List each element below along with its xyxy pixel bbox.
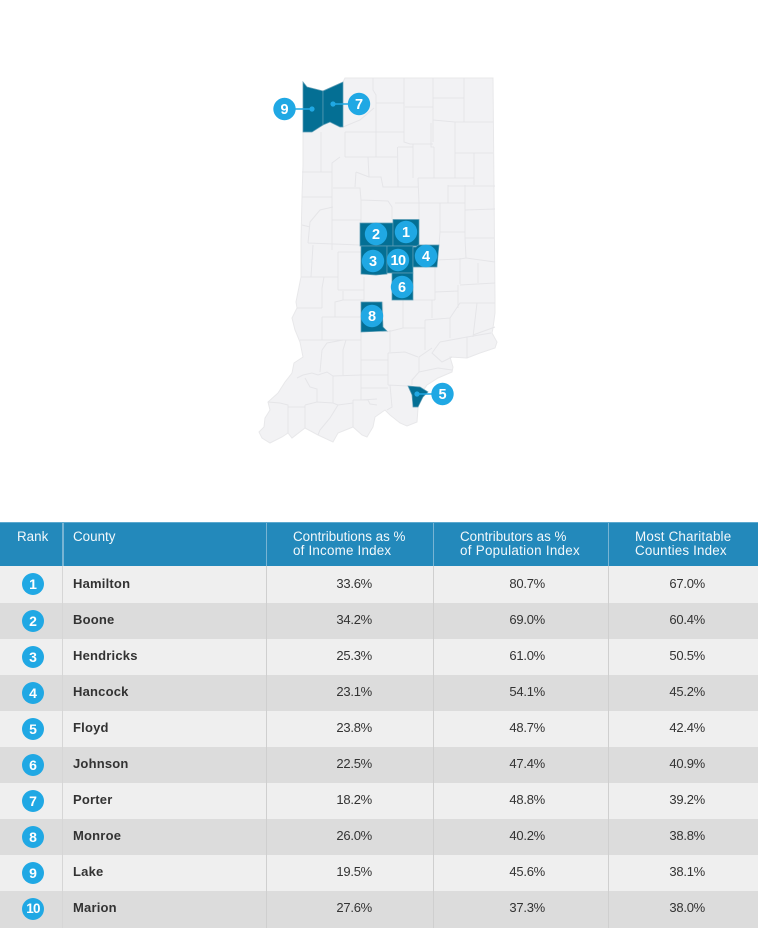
- connector: Floyd: [414, 391, 442, 397]
- row 1: 33.6%: [336, 576, 372, 591]
- row 1: Hamilton: [73, 576, 130, 591]
- county: Hendricks: [361, 246, 387, 275]
- row 6: 22.5%: [336, 756, 372, 771]
- row 4: 54.1%: [509, 684, 545, 699]
- marker 9: 9: [280, 102, 289, 118]
- row 4: [0, 675, 758, 711]
- row 7: 39.2%: [669, 792, 705, 807]
- row 5: Floyd: [73, 720, 109, 735]
- heading: contributions: Contributions as %: [293, 529, 405, 544]
- marker 8: 8: [368, 309, 376, 325]
- row 8: [0, 819, 758, 855]
- heading: contributors: Contributors as %: [460, 529, 566, 544]
- county: Johnson: [392, 273, 413, 300]
- row 7: Porter: [73, 792, 112, 807]
- marker 7: [348, 93, 370, 115]
- row 1: [0, 566, 758, 603]
- row 9: 9: [29, 864, 37, 880]
- row 9: 45.6%: [509, 864, 545, 879]
- heading: contributors: [460, 529, 580, 558]
- row 5: 42.4%: [669, 720, 705, 735]
- marker 10: [387, 249, 409, 271]
- county: Monroe: [361, 302, 387, 332]
- heading: charitable index: Most Charitable: [635, 529, 731, 544]
- row 2: 34.2%: [336, 612, 372, 627]
- row 8: Monroe: [73, 828, 121, 843]
- row 3: [0, 639, 758, 675]
- row 10: [0, 891, 758, 928]
- rank markers: [273, 93, 454, 405]
- row 4: 4: [29, 684, 37, 700]
- row 7: 48.8%: [509, 792, 545, 807]
- row 2: 69.0%: [509, 612, 545, 627]
- map of Indiana: [258, 78, 498, 444]
- connector: Lake: [285, 106, 315, 112]
- row 9: 19.5%: [336, 864, 372, 879]
- row 1: 1: [29, 576, 37, 592]
- marker 6: [391, 276, 413, 298]
- row 10: Marion: [73, 900, 117, 915]
- row 3: 61.0%: [509, 648, 545, 663]
- heading: county: County: [73, 529, 115, 544]
- row 9: Lake: [73, 864, 103, 879]
- row 1: 80.7%: [509, 576, 545, 591]
- state outline: [259, 78, 497, 443]
- heading: rank: Rank: [17, 529, 48, 544]
- row 4: 45.2%: [669, 684, 705, 699]
- row 6: 47.4%: [509, 756, 545, 771]
- county: Marion: [387, 246, 413, 273]
- row 6: Johnson: [73, 756, 129, 771]
- row 3: 25.3%: [336, 648, 372, 663]
- row 4: 23.1%: [336, 684, 372, 699]
- row 8: 8: [29, 828, 37, 844]
- row 6: [0, 747, 758, 783]
- callout connectors: [285, 101, 442, 397]
- row 9: [0, 855, 758, 891]
- row 9: 38.1%: [669, 864, 705, 879]
- row 8: 40.2%: [509, 828, 545, 843]
- row 10: 38.0%: [669, 900, 705, 915]
- marker 1: 1: [402, 225, 410, 241]
- row 1: 67.0%: [669, 576, 705, 591]
- row 5: [0, 711, 758, 747]
- row 3: 3: [29, 648, 37, 664]
- heading: charitable index: Counties Index: [635, 543, 727, 558]
- row 6: 40.9%: [669, 756, 705, 771]
- row 8: 26.0%: [336, 828, 372, 843]
- heading: contributions: [293, 529, 405, 558]
- row 10: 27.6%: [336, 900, 372, 915]
- marker 4: 4: [422, 249, 430, 265]
- row 7: [0, 783, 758, 819]
- marker 6: 6: [398, 280, 406, 296]
- heading: contributions: of Income Index: [293, 543, 391, 558]
- heading: charitable index: [635, 529, 731, 558]
- marker 8: [361, 305, 383, 327]
- row 2: 2: [29, 612, 37, 628]
- marker 1: [395, 221, 417, 243]
- marker 9: [273, 98, 296, 120]
- marker 2: 2: [372, 227, 380, 243]
- heading: contributors: of Population Index: [460, 543, 580, 558]
- row 10: 37.3%: [509, 900, 545, 915]
- marker 5: 5: [438, 387, 447, 403]
- row 8: 38.8%: [669, 828, 705, 843]
- marker 10: 10: [391, 253, 406, 269]
- marker 5: [431, 383, 454, 405]
- row 7: 18.2%: [336, 792, 372, 807]
- row 4: Hancock: [73, 684, 129, 699]
- county borders: [268, 78, 495, 435]
- row 2: 60.4%: [669, 612, 705, 627]
- table header: [0, 522, 758, 566]
- marker 2: [365, 223, 387, 245]
- row 5: 48.7%: [509, 720, 545, 735]
- row 7: 7: [29, 792, 37, 808]
- county: Hancock: [413, 245, 439, 267]
- marker 4: [415, 245, 437, 267]
- row 2: Boone: [73, 612, 114, 627]
- row 2: [0, 603, 758, 639]
- marker 3: 3: [369, 254, 377, 270]
- county: Lake: [303, 82, 323, 132]
- marker 3: [362, 250, 384, 272]
- row 6: 6: [29, 756, 37, 772]
- county: Boone: [360, 223, 393, 246]
- row 3: 50.5%: [669, 648, 705, 663]
- county: Porter: [323, 82, 343, 127]
- county: Hamilton: [393, 220, 419, 246]
- row 5: 23.8%: [336, 720, 372, 735]
- county: Floyd: [408, 386, 428, 407]
- row 3: Hendricks: [73, 648, 138, 663]
- highlighted counties: [303, 82, 439, 407]
- connector: Porter: [330, 101, 359, 107]
- row 5: 5: [29, 720, 37, 736]
- row 10: 10: [26, 900, 40, 916]
- marker 7: 7: [355, 97, 363, 113]
